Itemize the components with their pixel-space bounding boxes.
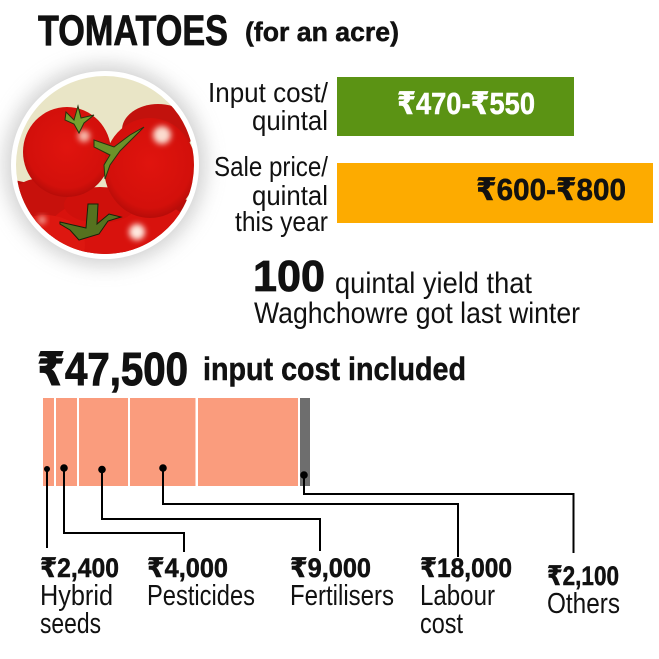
input cost bar: ₹470-₹550 [397, 86, 535, 121]
sale price label: this year [235, 206, 328, 237]
label: pesticides: Pesticides [147, 580, 255, 612]
sale price label [214, 151, 328, 237]
tomato photo [5, 65, 205, 275]
label: hybrid seeds [40, 553, 119, 640]
yield note: 100 [253, 252, 325, 301]
label: pesticides: ₹4,000 [147, 553, 228, 583]
title: (for an acre) [245, 17, 399, 47]
sale price label: Sale price/ [214, 151, 328, 182]
yield note: quintal yield that [335, 267, 533, 300]
label: labour cost: ₹18,000 [420, 553, 512, 583]
label: hybrid seeds: Hybrid [40, 580, 113, 612]
sale price bar [337, 163, 653, 223]
total input cost heading: ₹47,500 [37, 343, 188, 395]
label: pesticides [147, 553, 255, 612]
total input cost heading [37, 343, 466, 395]
yield note [253, 252, 580, 330]
stacked cost bar [43, 398, 310, 486]
label: others: Others [547, 588, 620, 620]
input cost label [208, 77, 328, 136]
label: labour cost: Labour [420, 580, 495, 612]
title: TOMATOES [38, 7, 228, 55]
label: others: ₹2,100 [547, 561, 619, 591]
title [38, 7, 399, 55]
label: hybrid seeds: ₹2,400 [40, 553, 119, 583]
label: fertilisers: ₹9,000 [290, 553, 371, 583]
connector lines [44, 464, 574, 557]
total input cost heading: input cost included [203, 351, 466, 387]
label: hybrid seeds: seeds [40, 608, 101, 640]
input cost bar [337, 77, 574, 136]
input cost label: quintal [252, 105, 328, 136]
label: labour cost [420, 553, 512, 640]
label: others [547, 561, 620, 620]
sale price bar: ₹600-₹800 [476, 172, 626, 207]
label: fertilisers: Fertilisers [290, 580, 394, 612]
yield note: Waghchowre got last winter [254, 297, 580, 330]
sale price label: quintal [252, 180, 328, 211]
label: labour cost: cost [420, 608, 463, 640]
label: fertilisers [290, 553, 394, 612]
input cost label: Input cost/ [208, 77, 328, 108]
